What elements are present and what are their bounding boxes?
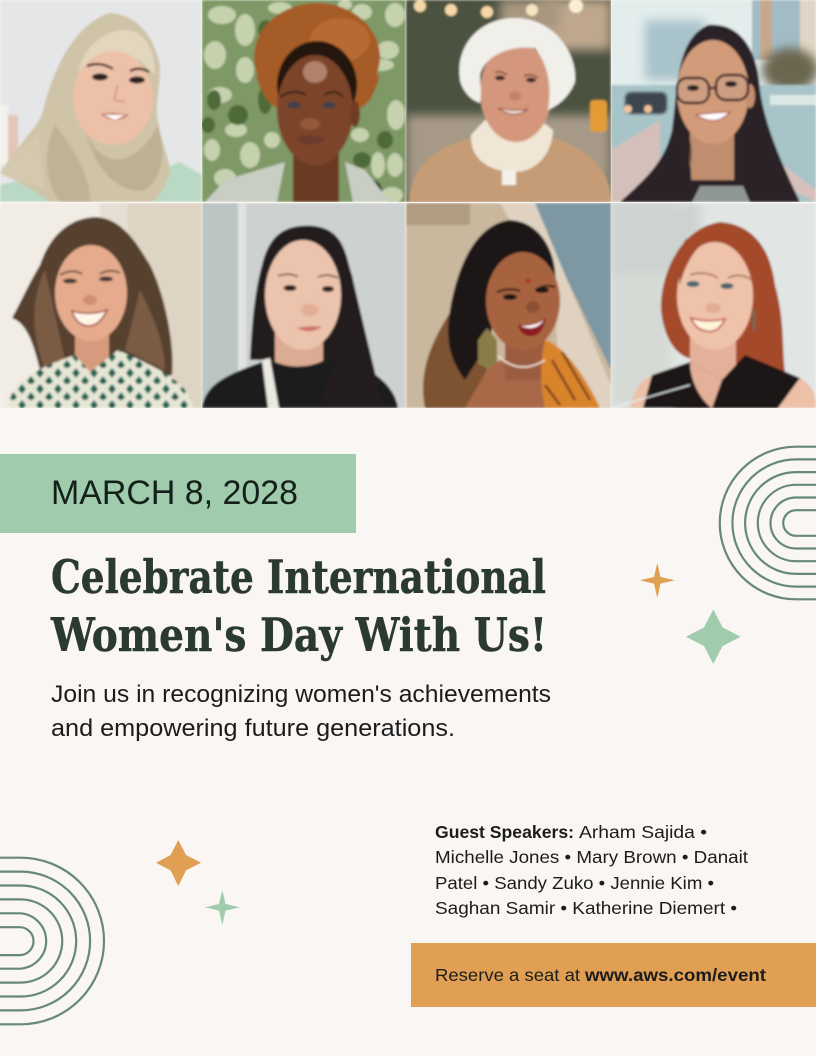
sparkle: small mint bottom xyxy=(205,890,240,925)
reservation text: Reserve a seat at xyxy=(435,965,580,985)
photo grid of eight women xyxy=(0,0,816,408)
title: Women's Day With Us! xyxy=(50,608,547,662)
reservation text xyxy=(435,965,766,985)
subtitle: and empowering future generations. xyxy=(51,715,455,742)
reservation banner xyxy=(411,943,816,1007)
sparkle: large mint top xyxy=(686,610,740,664)
guest speakers text: Arham Sajida • xyxy=(579,822,707,842)
guest speakers text: Patel • Sandy Zuko • Jennie Kim • xyxy=(435,873,714,893)
portrait: woman with auburn afro against leaves xyxy=(201,0,406,203)
decorative arches: bottom left xyxy=(0,858,104,1024)
sparkle: large orange bottom xyxy=(156,840,201,886)
portrait: woman with dark curly hair, bindi and orange scarf xyxy=(406,203,611,408)
guest speakers text: Guest Speakers: xyxy=(435,822,574,842)
portrait: woman with long dark hair and glasses xyxy=(611,0,816,202)
portrait: older woman with white hair in tan sweater xyxy=(406,0,611,202)
date banner xyxy=(0,454,356,533)
guest speakers text: Saghan Samir • Katherine Diemert • xyxy=(435,898,737,918)
portrait: red-haired woman in black top xyxy=(611,203,816,408)
decorative arches: top right xyxy=(720,447,816,599)
guest speakers text: Michelle Jones • Mary Brown • Danait xyxy=(435,847,748,867)
portrait: woman in beige hijab xyxy=(0,0,202,202)
guest speakers text xyxy=(435,822,748,918)
title: Celebrate International xyxy=(51,550,546,604)
portrait: smiling woman with curly brown hair xyxy=(0,203,202,408)
subtitle xyxy=(51,681,551,742)
date text: MARCH 8, 2028 xyxy=(51,474,298,512)
sparkle: small orange top xyxy=(640,563,675,598)
portrait: young woman with long straight black hair xyxy=(202,203,406,408)
subtitle: Join us in recognizing women's achievements xyxy=(51,681,551,708)
title xyxy=(50,550,547,662)
reservation text: www.aws.com/event xyxy=(584,965,766,985)
